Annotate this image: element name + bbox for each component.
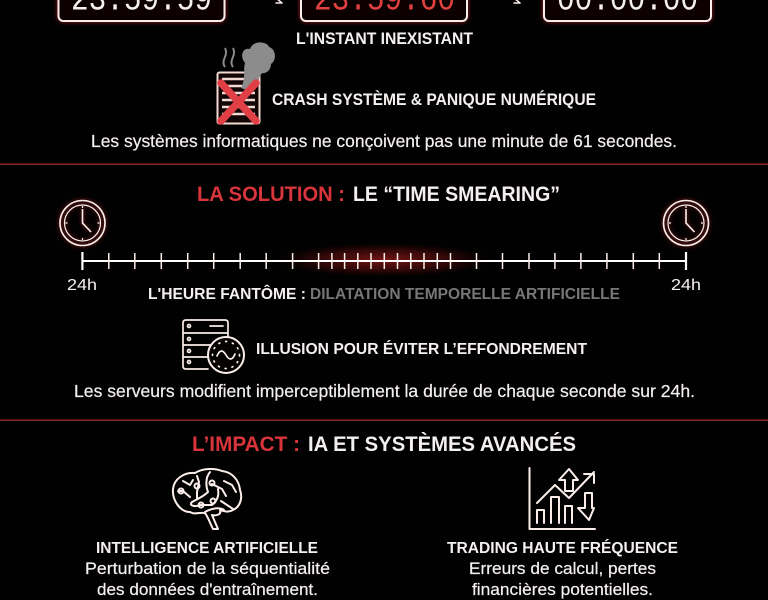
label: intelligence artificielle: INTELLIGENCE ARTIFICIELLE — [96, 540, 318, 557]
label: trading haute fréquence: TRADING HAUTE FRÉQUENCE — [447, 538, 678, 557]
icon: server with clock — [183, 320, 244, 373]
heading: illusion: ILLUSION POUR ÉVITER L’EFFONDREMENT — [256, 339, 587, 358]
label: 24h left: 24h — [67, 277, 97, 294]
label: l'instant inexistant: L'INSTANT INEXISTANT — [296, 29, 474, 48]
caption: l'heure fantôme: DILATATION TEMPORELLE ARTIFICIELLE — [310, 286, 620, 303]
icon: crashed server with smoke — [218, 42, 275, 124]
text: 61 secondes: Les systèmes informatiques ne conçoivent pas une minute de 61 secondes. — [91, 131, 677, 151]
icon: clock left — [60, 200, 105, 246]
icon: clock right — [664, 200, 708, 246]
text: trading impact: Erreurs de calcul, pertes — [469, 560, 656, 578]
text: trading impact: financières potentielles. — [472, 581, 653, 599]
icon: trading chart — [530, 468, 595, 529]
title: l'impact: L’IMPACT : — [192, 433, 300, 456]
arrow 2 — [514, 0, 520, 3]
icon: brain — [173, 469, 241, 529]
title: la solution: LE “TIME SMEARING” — [353, 183, 560, 206]
chart: timeline with dilated ticks — [82, 243, 686, 277]
arrow 1 — [276, 0, 282, 3]
title: la solution: LA SOLUTION : — [197, 183, 345, 206]
text: AI impact: Perturbation de la séquentialité — [85, 560, 330, 578]
text: serveurs: Les serveurs modifient imperceptiblement la durée de chaque seconde sur 24h. — [74, 381, 695, 401]
heading: crash système: CRASH SYSTÈME & PANIQUE NUMÉRIQUE — [272, 90, 596, 109]
text: AI impact: des données d'entraînement. — [97, 581, 318, 599]
title: l'impact: IA ET SYSTÈMES AVANCÉS — [308, 433, 576, 456]
label: 24h right: 24h — [671, 277, 701, 294]
caption: l'heure fantôme: L'HEURE FANTÔME : — [148, 284, 306, 303]
